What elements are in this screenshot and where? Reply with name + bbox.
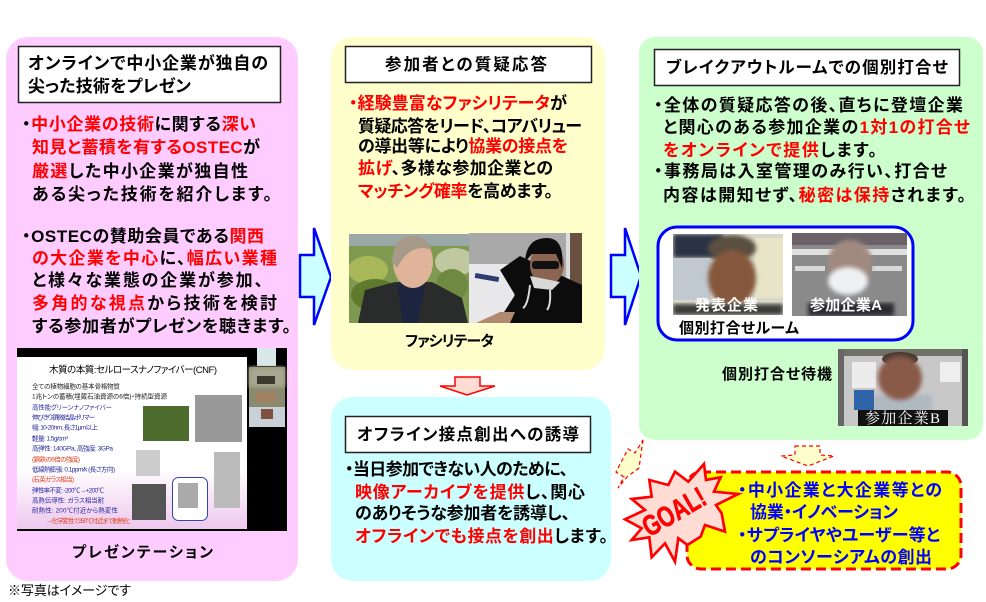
text block: first bullet: 知見と蓄積を有するOSTECが xyxy=(32,137,260,157)
image: presenting company xyxy=(673,234,783,315)
text block: breakout: をオンラインで提供します。 xyxy=(663,141,877,160)
label: breakout room: 個別打合せルーム xyxy=(679,319,799,337)
image: presentation slide screenshot: 伸びきり鎖微結晶ポリマー xyxy=(32,412,95,422)
text block: offline: オフラインでも接点を創出します。 xyxy=(355,527,608,546)
callout: goal box xyxy=(687,472,961,569)
panel: online presentation xyxy=(6,37,298,581)
image: facilitator left xyxy=(348,234,475,323)
text block: second bullet: ・OSTECの賛助会員である関西 xyxy=(22,227,264,246)
heading box: Q and A xyxy=(346,46,592,82)
text block: first bullet: ある尖った技術を紹介します。 xyxy=(32,185,272,204)
image: presentation slide screenshot: 木質の本質:セルロースナノファイバー(CNF) xyxy=(49,364,217,376)
heading box: presentation: 尖った技術をプレゼン xyxy=(28,76,191,96)
image: presentation slide screenshot xyxy=(17,348,287,531)
text block: Q and A: の導出等により協業の接点を xyxy=(358,136,568,156)
image: presentation slide screenshot: 1兆トンの蓄積(埋蔵石油資源の6倍)・持続型資源 xyxy=(32,392,168,400)
callout: goal box: のコンソーシアムの創出 xyxy=(750,548,932,567)
heading box: breakout: ブレイクアウトルームでの個別打合せ xyxy=(666,57,948,77)
text block: second bullet: する参加者がプレゼンを聴きます。 xyxy=(32,316,291,336)
text block: offline: 映像アーカイブを提供し、関心 xyxy=(355,482,585,502)
image: participant B xyxy=(838,349,968,427)
image: presentation slide screenshot: →化学変性で250℃付近まで耐熱化 xyxy=(46,516,130,525)
text block: breakout: と関心のある参加企業の1対1の打合せ xyxy=(663,117,970,137)
text block: first bullet: 厳選した中小企業が独自性 xyxy=(32,161,248,181)
image: presentation slide screenshot: 耐熱性: 200℃付近から熱変性 xyxy=(32,506,118,514)
text block: offline: のありそうな参加者を誘導し、 xyxy=(355,504,570,523)
panel: Q and A xyxy=(331,37,605,370)
icon: goal starburst: GOAL! xyxy=(637,482,712,543)
heading box: offline xyxy=(346,416,590,452)
image: participant B: 参加企業B xyxy=(865,410,940,427)
text block: second bullet: と様々な業態の企業が参加、 xyxy=(32,270,263,290)
text block: Q and A: ・経験豊富なファシリテータが xyxy=(349,93,567,113)
note: image disclaimer: ※写真はイメージです xyxy=(8,583,132,598)
callout: goal box: ・中小企業と大企業等との xyxy=(738,480,942,500)
image: participant A: 参加企業A xyxy=(810,296,882,314)
caption: presentation: プレゼンテーション xyxy=(72,543,214,561)
text block: breakout xyxy=(654,95,970,205)
text block: Q and A: 拡げ、多様な参加企業との xyxy=(358,158,553,178)
image: presentation slide screenshot: 高熱伝導性: ガラス相当耐 xyxy=(32,496,104,504)
text block: offline xyxy=(345,460,608,546)
image: presentation slide screenshot: (石英ガラス相当) xyxy=(32,474,74,484)
text block: Q and A: 質疑応答をリード、コアバリュー xyxy=(358,116,582,136)
text block: Q and A: マッチング確率を高めます。 xyxy=(358,181,553,201)
image: presentation slide screenshot: 全ての植物細胞の基本骨格物質 xyxy=(32,382,120,390)
text block: first bullet: ・中小企業の技術に関する深い xyxy=(22,114,256,134)
text block: breakout: ・全体の質疑応答の後、直ちに登壇企業 xyxy=(654,95,963,115)
heading box: presentation: オンラインで中小企業が独自の xyxy=(28,53,268,73)
breakout room frame xyxy=(658,227,913,340)
label: waiting: 個別打合せ待機 xyxy=(722,365,832,383)
heading box: Q and A: 参加者との質疑応答 xyxy=(385,54,548,74)
callout: goal box: 協業・イノベーション xyxy=(750,503,898,522)
arrow: red down xyxy=(440,377,495,395)
panel background green xyxy=(639,37,983,440)
callout: goal box: ・サプライヤやユーザー等と xyxy=(738,525,940,545)
panel background pink xyxy=(6,37,298,581)
arrow: dashed down to goal xyxy=(781,446,834,466)
image: presentation slide screenshot: 軽量: 1.5g/cm³ xyxy=(32,434,69,442)
panel: offline contact xyxy=(331,397,611,581)
arrow: blue right 2 xyxy=(611,228,641,325)
image: presentation slide screenshot: (鋼鉄の6倍の強度) xyxy=(32,454,80,464)
panel background cyan xyxy=(331,397,611,581)
icon: goal starburst xyxy=(625,464,738,562)
image: presentation slide screenshot: 幅: 10-20nm, 長さ1μm以上 xyxy=(32,422,98,432)
heading box: breakout xyxy=(654,50,960,86)
text block: offline: ・当日参加できない人のために、 xyxy=(345,460,568,479)
text block: Q and A xyxy=(349,93,582,201)
heading box: offline: オフライン接点創出への誘導 xyxy=(357,425,580,444)
image: presentation slide screenshot: 高性能グリーンナノファイバー xyxy=(32,402,112,412)
image: presenting company: 発表企業 xyxy=(695,296,758,314)
text block: second bullet: 多角的な視点から技術を検討 xyxy=(32,293,277,313)
image: presentation slide screenshot: 低線熱膨張: 0.1ppm/k (長さ方向) xyxy=(32,464,115,474)
arrow: blue right 1 xyxy=(300,228,331,325)
caption: facilitator: ファシリテータ xyxy=(405,333,494,350)
image: facilitator right xyxy=(469,233,582,323)
text block: second bullet: の大企業を中心に、幅広い業種 xyxy=(32,248,277,268)
text block: breakout: ・事務局は入室管理のみ行い、打合せ xyxy=(654,161,947,181)
text block: first bullet xyxy=(22,114,272,204)
image: presentation slide screenshot: 高弾性: 140GPa、高強度: 3GPa xyxy=(32,444,113,452)
panel: breakout room xyxy=(639,37,983,440)
arrow: dashed diagonal to goal xyxy=(616,440,643,488)
image: presentation slide screenshot: 弾性率不変: -200℃→+200℃ xyxy=(32,486,104,494)
image: participant A xyxy=(792,233,907,316)
text block: second bullet xyxy=(22,227,291,336)
text block: breakout: 内容は開知せず、秘密は保持されます。 xyxy=(663,185,966,205)
heading box: presentation xyxy=(18,46,280,102)
panel background yellow xyxy=(331,37,605,370)
